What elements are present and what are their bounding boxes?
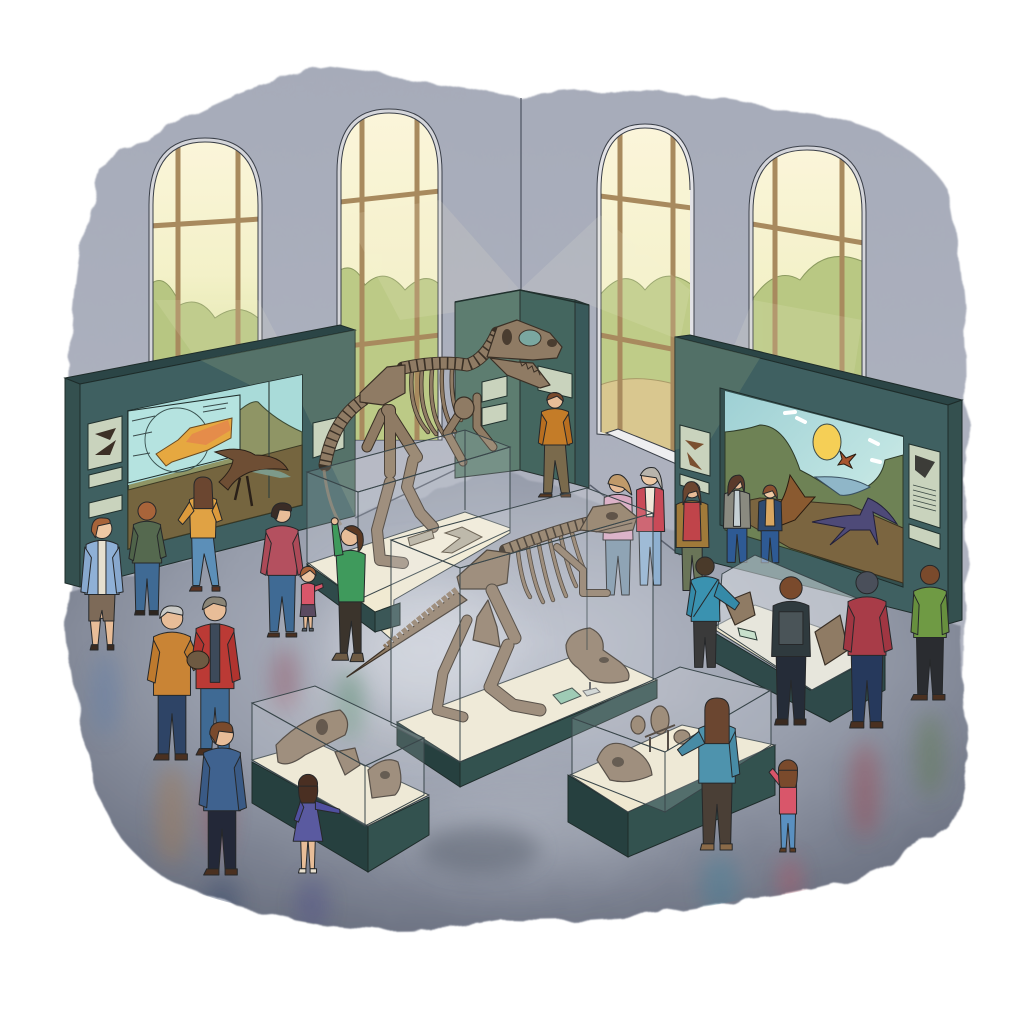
tail [347, 590, 467, 677]
right label 2 [909, 524, 940, 549]
floor reflections [91, 580, 944, 933]
visitor: woman in blue sweater [677, 698, 740, 850]
tail [324, 400, 363, 525]
central case glass [391, 488, 653, 762]
map and diorama mural [128, 375, 302, 549]
right poster 2 [909, 444, 940, 528]
right back case [710, 555, 885, 722]
visitor: orange sweater [178, 477, 222, 591]
specimen label [553, 688, 581, 704]
left label 2 [89, 495, 122, 518]
central case base [397, 650, 657, 787]
shoulder and arms [447, 397, 493, 462]
landscape mural [720, 388, 903, 587]
background blob: hall wall and floor wash [67, 68, 968, 930]
window 2 [337, 109, 442, 442]
ribs [518, 533, 585, 602]
small wall label [538, 366, 572, 398]
small wall label 3 [482, 403, 507, 426]
right label 1 [680, 474, 709, 494]
ribs [411, 370, 461, 436]
small label [738, 628, 757, 640]
visitor: green sweater [129, 502, 166, 615]
spare bones on plinth [408, 527, 482, 553]
visitor: child purple dress [293, 774, 340, 873]
visitor: green sweater right [911, 565, 949, 700]
left poster 1 [88, 416, 122, 470]
visitor: teal jacket with bag [687, 557, 740, 667]
visitor: child in pink [769, 760, 798, 852]
far leg [367, 413, 383, 447]
group of visitors behind central case [603, 468, 782, 595]
mounted fossils [631, 706, 690, 752]
window 4 [749, 146, 866, 383]
skull specimen [597, 743, 652, 782]
rear legs [377, 410, 433, 563]
glass [252, 686, 424, 826]
spine [505, 522, 590, 550]
feathered dinosaur model [215, 449, 291, 506]
back case glass [307, 430, 510, 600]
pubis [473, 600, 500, 647]
woman navy jacket [758, 485, 782, 563]
skull specimen 2 [815, 615, 848, 665]
glass [572, 667, 771, 812]
glass case: back skeleton base [307, 512, 510, 640]
pelvis [457, 550, 510, 589]
visitor: backpack [772, 577, 810, 725]
woman red top [637, 468, 665, 585]
visitor: man navy jacket [199, 722, 246, 875]
small wall label 2 [482, 376, 507, 402]
large skull [276, 710, 348, 764]
window 1 [149, 138, 262, 365]
right display wall [675, 335, 962, 624]
flying pterosaur [838, 451, 856, 468]
sun [813, 424, 841, 460]
back corner display wall [455, 290, 589, 488]
skull [487, 320, 562, 388]
visitor: blue jacket [81, 518, 123, 650]
older man amber jacket [147, 606, 201, 760]
pelvis [360, 365, 405, 405]
lower left case [252, 686, 429, 872]
light beams from windows [155, 200, 862, 400]
map inset [128, 395, 240, 483]
triceratops skull exhibit [566, 628, 629, 696]
front T. rex skeleton [347, 503, 637, 717]
left display wall [65, 325, 355, 587]
skull [580, 503, 637, 533]
left poster 2 [313, 416, 344, 458]
visitor: small child [300, 566, 323, 631]
far leg [437, 620, 467, 717]
fossil in hand [187, 651, 209, 669]
small skull [335, 748, 360, 775]
man looking at skeleton beside corner wall [538, 392, 573, 497]
visitor: rose sweater [261, 503, 303, 637]
arm [557, 547, 607, 593]
woman pink top [603, 475, 633, 595]
window 3 [597, 124, 694, 470]
rear leg [490, 590, 540, 710]
woman with scarf [676, 482, 709, 590]
right poster 1 [680, 425, 710, 476]
visitors: two men examining fossil [147, 597, 240, 760]
back T. rex skeleton [324, 320, 562, 563]
visitor: red sweater [843, 572, 892, 728]
skull right [368, 760, 401, 798]
man red jacket [191, 597, 240, 755]
woman grey coat [724, 475, 750, 562]
girl in green hoodie [331, 518, 365, 662]
left label 1 [89, 467, 122, 488]
lower right case [568, 667, 775, 857]
spine and neck [403, 333, 497, 368]
skull specimen [725, 592, 755, 625]
